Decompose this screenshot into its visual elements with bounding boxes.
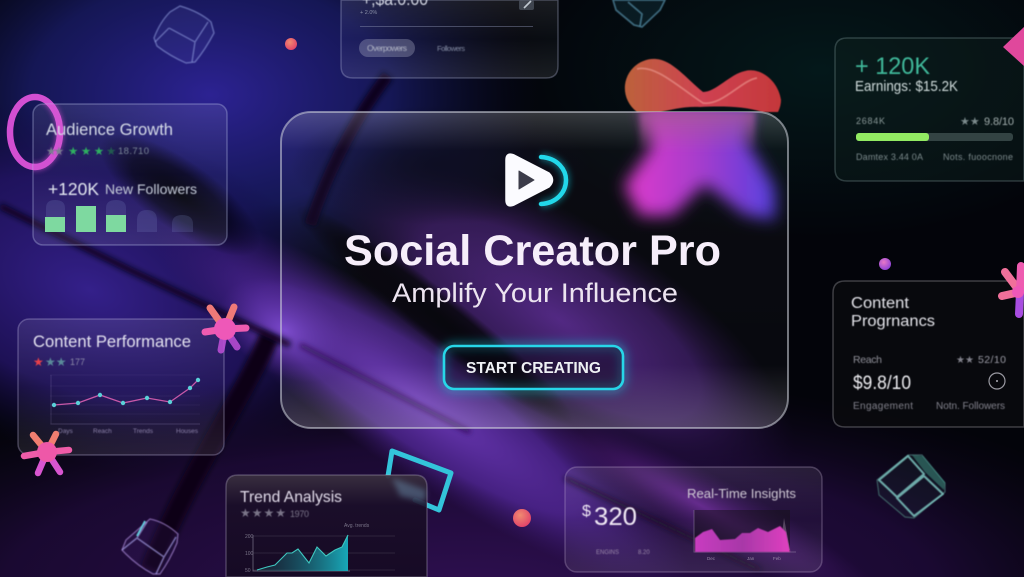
heading: Real-Time Insights <box>687 486 796 501</box>
small caption: + 2.0% <box>360 10 377 16</box>
stat: New Followers <box>105 181 197 197</box>
rating: 177 <box>70 357 85 367</box>
reach row: 52/10 <box>978 354 1006 366</box>
rating <box>240 506 309 520</box>
area chart <box>245 523 395 574</box>
icon: red 3D X <box>625 59 781 112</box>
rating: ★ <box>106 146 116 158</box>
stat: $ <box>582 503 591 520</box>
progress bar <box>856 133 1013 141</box>
divider <box>360 26 533 27</box>
icon: dial <box>989 373 1005 389</box>
progress labels: 9.8/10 <box>984 116 1014 128</box>
heading: Content Performance <box>33 333 191 351</box>
tab label: Followers <box>437 44 465 53</box>
panel: earnings <box>835 38 1024 181</box>
reach row: Reach <box>853 354 882 366</box>
rating <box>46 146 149 158</box>
logo <box>506 154 566 206</box>
icon: pink asterisk lower <box>24 434 69 473</box>
footer labels: Notn. Followers <box>936 401 1005 412</box>
icon: glass cube right <box>877 455 945 518</box>
rating: 18.710 <box>118 146 149 157</box>
area chart <box>694 510 796 561</box>
panel: real-time insights <box>565 467 822 572</box>
icon: sphere coral bottom <box>513 509 531 527</box>
area chart: Feb <box>773 556 781 561</box>
icon: sphere coral small <box>285 38 297 50</box>
tab pill <box>359 39 415 57</box>
rating: ★★★★ <box>240 506 286 520</box>
reach row: ★★ <box>956 355 974 366</box>
panel: content programs <box>833 281 1024 427</box>
icon: cyan square frame <box>388 451 451 510</box>
rating: ★★ <box>46 146 64 158</box>
heading: Content <box>851 295 910 312</box>
line chart: Houses <box>176 428 199 435</box>
line chart: Reach <box>93 428 112 435</box>
footer labels <box>856 152 1013 162</box>
area chart: 200 <box>245 534 254 540</box>
heading: Trend Analysis <box>240 489 342 506</box>
value: $9.8/10 <box>853 373 911 394</box>
panel: trend analysis <box>226 475 427 577</box>
rating: ★★ <box>45 355 67 369</box>
icon: pink asterisk upper <box>205 307 246 350</box>
area chart: Avg. trends <box>344 523 370 529</box>
frame seen through glass <box>392 478 426 502</box>
line chart <box>50 375 200 435</box>
heading: Audience Growth <box>46 120 173 139</box>
button: START CREATING <box>466 360 601 377</box>
progress labels: ★★ <box>960 116 980 128</box>
icon: pink ring <box>10 97 60 167</box>
rating: ★ <box>33 355 44 369</box>
small labels: 8.20 <box>638 550 650 556</box>
button <box>444 346 623 389</box>
area chart: Dec <box>707 556 716 561</box>
rating: ★★★ <box>68 146 104 158</box>
tab pill: Overpowers <box>367 43 407 53</box>
footer labels: Nots. fuoocnone <box>943 152 1013 162</box>
area chart: 50 <box>245 568 251 574</box>
heading <box>851 295 935 330</box>
panel: top earnings card <box>341 0 558 78</box>
stat <box>48 179 197 199</box>
progress labels <box>856 116 1014 128</box>
small labels <box>596 550 650 556</box>
icon: glass cube top left <box>154 6 214 63</box>
panel: content performance <box>18 319 224 455</box>
stat: 320 <box>594 503 637 531</box>
earnings line: Earnings: $15.2K <box>855 79 958 95</box>
reach row <box>853 354 1006 366</box>
footer labels: Damtex 3.44 0A <box>856 152 923 162</box>
panel: main hero <box>281 106 788 428</box>
line chart: Trends <box>133 428 154 435</box>
panel: audience growth <box>32 103 228 246</box>
blurred X shape behind glass <box>624 106 775 220</box>
title: Social Creator Pro <box>344 227 721 275</box>
tagline: Amplify Your Influence <box>392 278 678 308</box>
area chart: Jan <box>747 556 755 561</box>
rating <box>33 355 85 369</box>
icon: edit pencil <box>519 0 534 10</box>
icon: glass cube top centre <box>613 0 665 27</box>
rating: 1970 <box>290 509 309 519</box>
area chart: 100 <box>245 551 254 557</box>
stat: + 120K <box>855 53 930 80</box>
stat: +120K <box>48 179 99 199</box>
ring seen through glass <box>33 104 67 174</box>
icon: pink diamond <box>1003 27 1024 66</box>
line chart: Days <box>58 428 74 435</box>
bar chart <box>45 200 193 232</box>
icon: pink asterisk right <box>1002 266 1024 314</box>
footer labels: Engagement <box>853 401 913 412</box>
icon: glass cube bottom left <box>122 519 178 574</box>
small labels: ENGINS <box>596 550 619 556</box>
icon: sphere violet <box>879 258 891 270</box>
progress labels: 2684K <box>856 116 885 126</box>
footer labels <box>853 401 1005 412</box>
heading: Progrnancs <box>851 313 935 330</box>
